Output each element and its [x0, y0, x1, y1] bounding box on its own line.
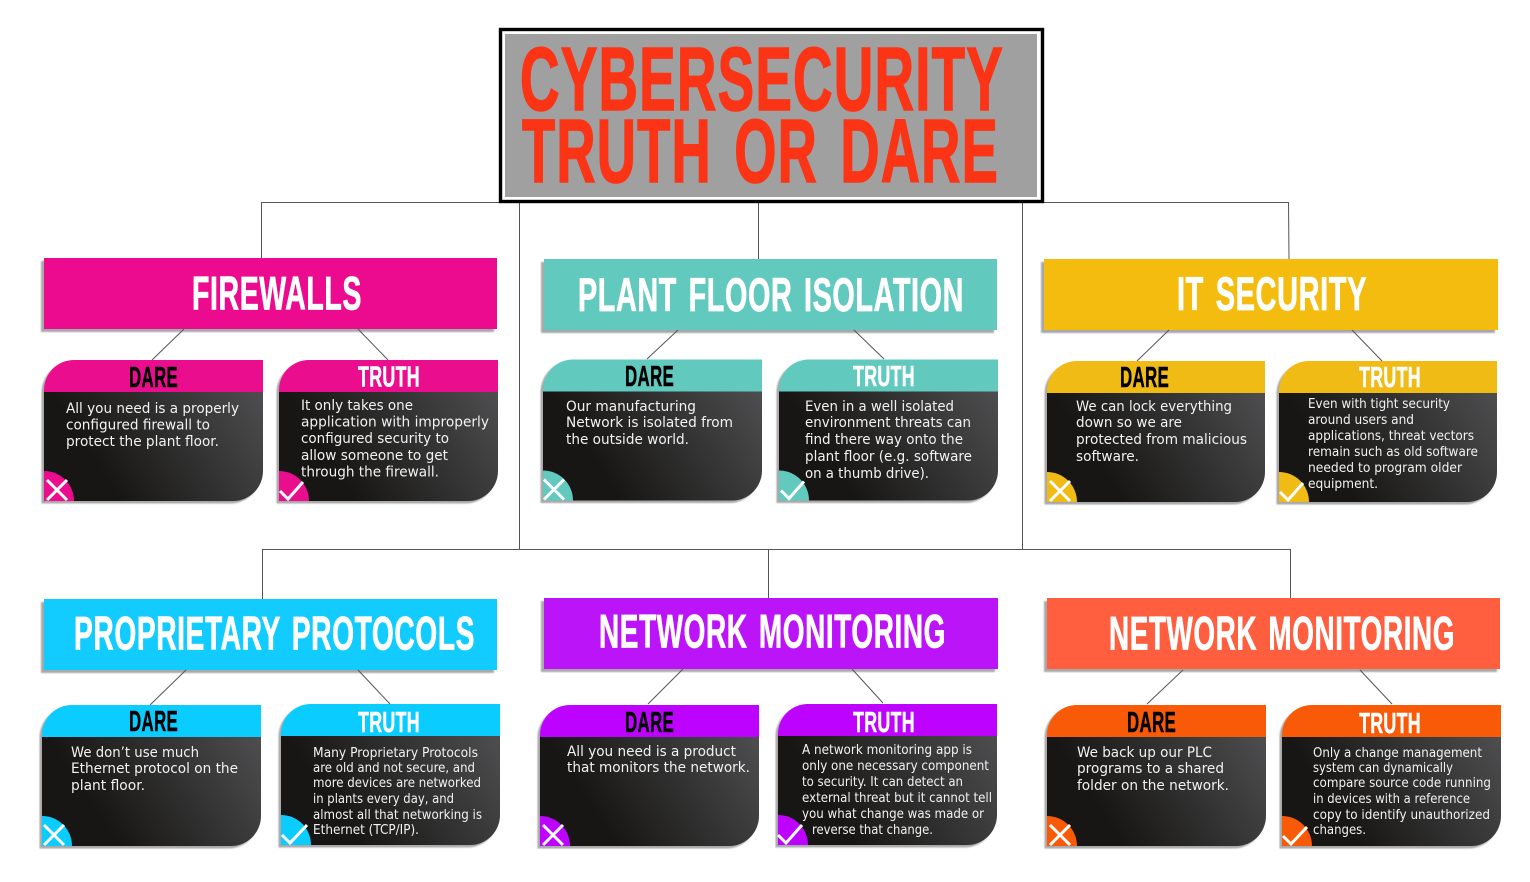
card: plant floor dare	[540, 360, 762, 503]
card: proprietary protocols truth: in plants every day, and	[313, 792, 454, 807]
panel heading: network monitoring purple: NETWORK MONITORING	[599, 604, 946, 658]
card: network monitoring dare: that monitors the network.	[567, 760, 750, 776]
card: firewalls truth: through the firewall.	[301, 464, 439, 480]
card: firewalls truth	[276, 360, 498, 504]
panel heading: proprietary protocols	[41, 599, 497, 673]
card: firewalls truth: It only takes one	[301, 398, 413, 414]
connector tree	[262, 202, 1290, 599]
card: plant floor truth: TRUTH	[853, 361, 915, 393]
card: it security truth	[1276, 361, 1497, 504]
card: plant floor truth: plant floor (e.g. software	[805, 449, 972, 465]
card: change management truth	[1280, 705, 1501, 848]
card: it security dare: protected from malicious	[1076, 432, 1247, 448]
card: it security truth: remain such as old software	[1308, 445, 1478, 460]
card: firewalls truth: TRUTH	[358, 362, 420, 394]
card: proprietary protocols dare: plant floor.	[71, 778, 145, 794]
card: plant floor truth: on a thumb drive).	[805, 466, 929, 482]
card: change management truth: in devices with a reference	[1313, 792, 1470, 807]
card: firewalls truth: allow someone to get	[301, 448, 448, 464]
card: proprietary protocols dare	[40, 705, 261, 848]
card: it security truth: needed to program older	[1308, 461, 1463, 476]
panel heading: firewalls	[41, 258, 497, 332]
card: change management truth: Only a change management	[1313, 746, 1482, 761]
card: proprietary protocols dare: We don’t use much	[71, 745, 199, 761]
card: proprietary protocols truth	[278, 704, 500, 848]
card: plant floor truth: environment threats can	[805, 415, 971, 431]
card: firewalls dare	[42, 360, 263, 504]
card: proprietary protocols truth: almost all that networking is	[313, 808, 482, 823]
card: plant floor truth: find there way onto the	[805, 432, 963, 448]
card: it security truth: TRUTH	[1359, 362, 1421, 394]
card: change management dare: DARE	[1127, 707, 1176, 739]
panel heading: proprietary protocols: PROPRIETARY PROTOCOLS	[74, 606, 475, 660]
card: proprietary protocols truth: TRUTH	[358, 707, 420, 739]
card: it security dare	[1044, 361, 1265, 504]
card: network monitoring dare	[538, 705, 759, 848]
card: plant floor truth	[776, 360, 998, 503]
card: plant floor dare: DARE	[625, 361, 674, 393]
card: change management truth: system can dynamically	[1313, 761, 1453, 776]
card: change management truth: changes.	[1313, 823, 1366, 838]
panel heading: it security: IT SECURITY	[1177, 267, 1367, 320]
card: network monitoring truth: external threat but it cannot tell	[802, 791, 992, 806]
card: network monitoring truth: TRUTH	[853, 707, 915, 739]
card: network monitoring truth: you what change was made or	[802, 807, 985, 822]
card: it security dare: We can lock everything	[1076, 399, 1232, 415]
card: network monitoring truth	[776, 704, 997, 848]
card: network monitoring dare: DARE	[625, 707, 674, 739]
card: network monitoring truth: only one necessary component	[802, 759, 989, 774]
card: proprietary protocols truth: Ethernet (TCP/IP).	[313, 823, 419, 838]
card: proprietary protocols truth: more devices are networked	[313, 776, 481, 791]
card: proprietary protocols truth: are old and not secure, and	[313, 761, 475, 776]
title	[500, 30, 1042, 202]
card: change management truth: compare source code running	[1313, 776, 1491, 791]
card: plant floor dare: the outside world.	[566, 432, 689, 448]
panel heading: network monitoring coral	[1044, 598, 1500, 672]
panel heading: network monitoring purple	[541, 598, 998, 672]
card: network monitoring truth: reverse that change.	[812, 823, 933, 838]
card: network monitoring truth: A network monitoring app is	[802, 743, 972, 758]
card: change management dare	[1044, 705, 1266, 848]
card: it security dare: down so we are	[1076, 415, 1182, 431]
card: it security truth: around users and	[1308, 413, 1414, 428]
card: it security truth: applications, threat vectors	[1308, 429, 1474, 444]
card: change management truth: TRUTH	[1359, 708, 1421, 740]
connectors from headings to cards	[150, 329, 1392, 705]
card: firewalls truth: configured security to	[301, 431, 449, 447]
card: it security dare: software.	[1076, 449, 1139, 465]
card: it security truth: Even with tight security	[1308, 397, 1450, 412]
card: network monitoring truth: to security. It can detect an	[802, 775, 963, 790]
card: change management dare: folder on the network.	[1077, 778, 1229, 794]
card: firewalls dare: DARE	[129, 362, 178, 394]
card: firewalls dare: configured firewall to	[66, 418, 210, 434]
card: change management dare: programs to a shared	[1077, 761, 1224, 777]
panel heading: plant floor isolation: PLANT FLOOR ISOLATION	[578, 268, 964, 321]
card: firewalls dare: All you need is a properly	[66, 401, 239, 417]
card: it security dare: DARE	[1120, 362, 1169, 394]
card: network monitoring dare: All you need is a product	[567, 744, 736, 760]
card: proprietary protocols truth: Many Proprietary Protocols	[313, 746, 478, 761]
card: proprietary protocols dare: DARE	[129, 706, 178, 738]
card: firewalls dare: protect the plant floor.	[66, 434, 219, 450]
card: firewalls truth: application with improperly	[301, 414, 489, 430]
card: proprietary protocols dare: Ethernet protocol on the	[71, 761, 238, 777]
title: TRUTH OR DARE	[522, 102, 999, 202]
card: change management dare: We back up our PLC	[1077, 745, 1212, 761]
panel heading: it security	[1041, 259, 1498, 333]
title: CYBERSECURITY	[520, 30, 1004, 130]
card: plant floor truth: Even in a well isolated	[805, 399, 954, 415]
panel heading: plant floor isolation	[541, 259, 997, 333]
panel heading: firewalls: FIREWALLS	[192, 266, 362, 320]
card: plant floor dare: Our manufacturing	[566, 399, 696, 415]
card: change management truth: copy to identify unauthorized	[1313, 808, 1490, 823]
card: it security truth: equipment.	[1308, 477, 1378, 492]
card: plant floor dare: Network is isolated from	[566, 415, 733, 431]
